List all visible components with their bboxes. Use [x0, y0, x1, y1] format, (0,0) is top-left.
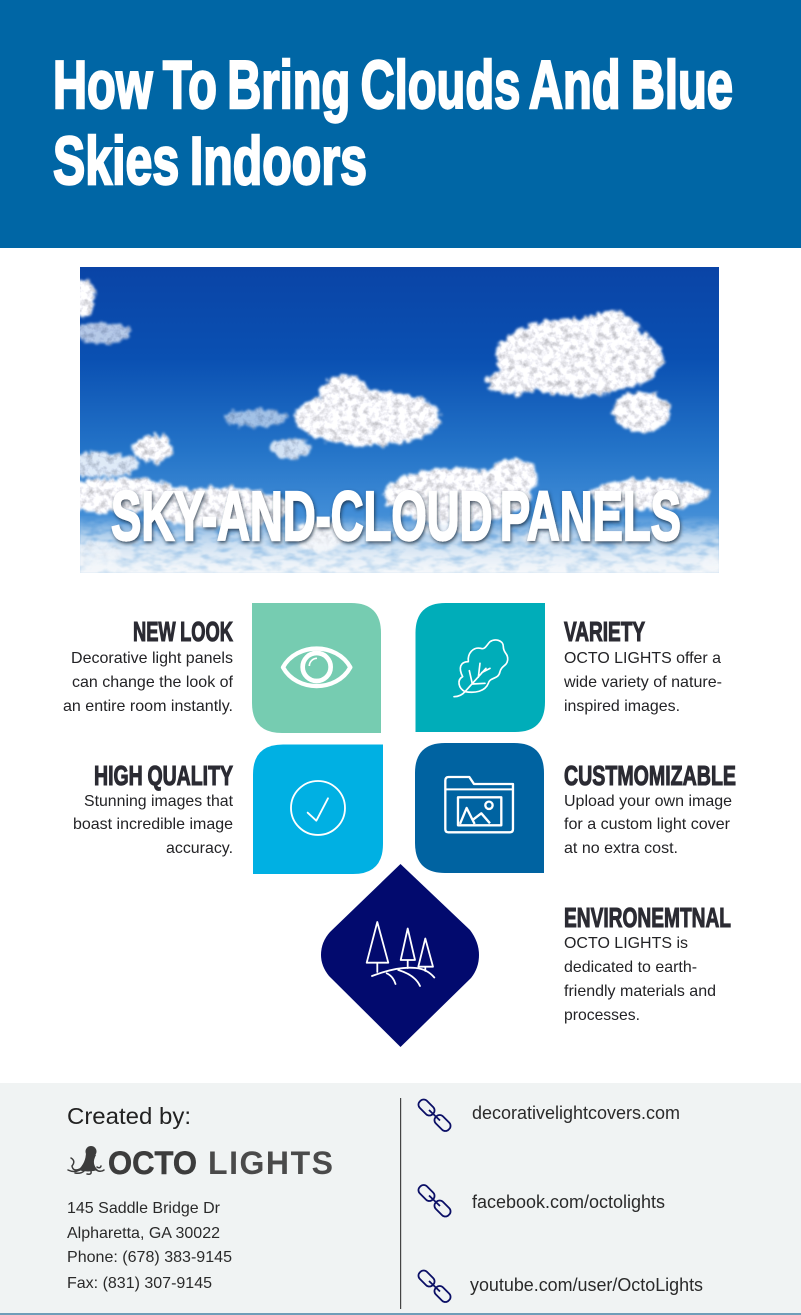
- link: youtube: youtube.com/user/OctoLights: [470, 1275, 703, 1295]
- address block: [67, 1200, 232, 1292]
- tile: trees diamond: [321, 864, 479, 1047]
- text: high quality: Stunning images that: [84, 793, 234, 810]
- heading: variety: VARIETY: [564, 616, 645, 647]
- text: new look: Decorative light panels: [71, 650, 233, 667]
- link: website: decorativelightcovers.com: [472, 1103, 680, 1123]
- icon: image folder: [445, 777, 513, 832]
- sky and clouds photo panel: [45, 267, 725, 611]
- text: variety: OCTO LIGHTS offer a: [564, 650, 721, 667]
- clouds: [80, 277, 719, 570]
- text: new look: can change the look of: [72, 674, 234, 691]
- tile: check: [253, 744, 383, 874]
- feature: customizable: [564, 760, 736, 857]
- address block: 145 Saddle Bridge Dr: [67, 1200, 221, 1217]
- feature: variety: [563, 616, 722, 715]
- address block: Fax: (831) 307-9145: [67, 1275, 212, 1292]
- text: high quality: [73, 793, 234, 857]
- heading: high quality: HIGH QUALITY: [94, 760, 233, 791]
- text: environmental: OCTO LIGHTS is: [564, 935, 688, 952]
- icon: check circle: [291, 781, 345, 835]
- distant cloud layer: [80, 515, 719, 573]
- title: Skies Indoors: [53, 123, 367, 199]
- header banner: [0, 0, 801, 248]
- feature: high quality: [73, 760, 234, 857]
- logo: octo lights: LIGHTS: [208, 1145, 333, 1181]
- text: high quality: accuracy.: [166, 840, 233, 857]
- text: customizable: [564, 793, 732, 857]
- link: facebook: facebook.com/octolights: [472, 1192, 665, 1212]
- icon: eye: [283, 649, 350, 686]
- icon: link facebook: [417, 1183, 452, 1218]
- feature: environmental: [564, 902, 731, 1024]
- created by label: Created by:: [67, 1103, 191, 1129]
- footer panel: [0, 1083, 801, 1315]
- text: variety: wide variety of nature-: [563, 674, 722, 691]
- text: environmental: dedicated to earth-: [564, 959, 697, 976]
- icon: link youtube: [417, 1269, 452, 1304]
- address block: Alpharetta, GA 30022: [67, 1225, 220, 1242]
- heading: new look: NEW LOOK: [133, 616, 233, 647]
- text: environmental: [564, 935, 716, 1024]
- text: high quality: boast incredible image: [73, 816, 233, 833]
- tile: folder: [415, 743, 544, 873]
- text: customizable: for a custom light cover: [564, 816, 731, 833]
- text: environmental: friendly materials and: [564, 983, 716, 1000]
- icon: leaf: [454, 640, 508, 697]
- title: [53, 47, 733, 199]
- text: variety: inspired images.: [564, 698, 680, 715]
- logo: octo lights: [68, 1145, 333, 1181]
- text: customizable: Upload your own image: [564, 793, 732, 810]
- logo: octo lights: OCTO: [108, 1145, 197, 1181]
- icon: octopus: [68, 1146, 104, 1174]
- address block: Phone: (678) 383-9145: [67, 1249, 232, 1266]
- text: customizable: at no extra cost.: [564, 840, 678, 857]
- text: new look: an entire room instantly.: [63, 698, 233, 715]
- text: new look: [63, 650, 234, 715]
- text: environmental: processes.: [564, 1007, 640, 1024]
- tile: eye: [252, 603, 381, 733]
- heading: environmental: ENVIRONEMTNAL: [564, 902, 731, 933]
- icon: link website: [417, 1098, 452, 1133]
- text: variety: [563, 650, 722, 715]
- icon: trees: [367, 922, 434, 986]
- tile: leaf: [416, 603, 545, 732]
- feature: new look: [63, 616, 234, 715]
